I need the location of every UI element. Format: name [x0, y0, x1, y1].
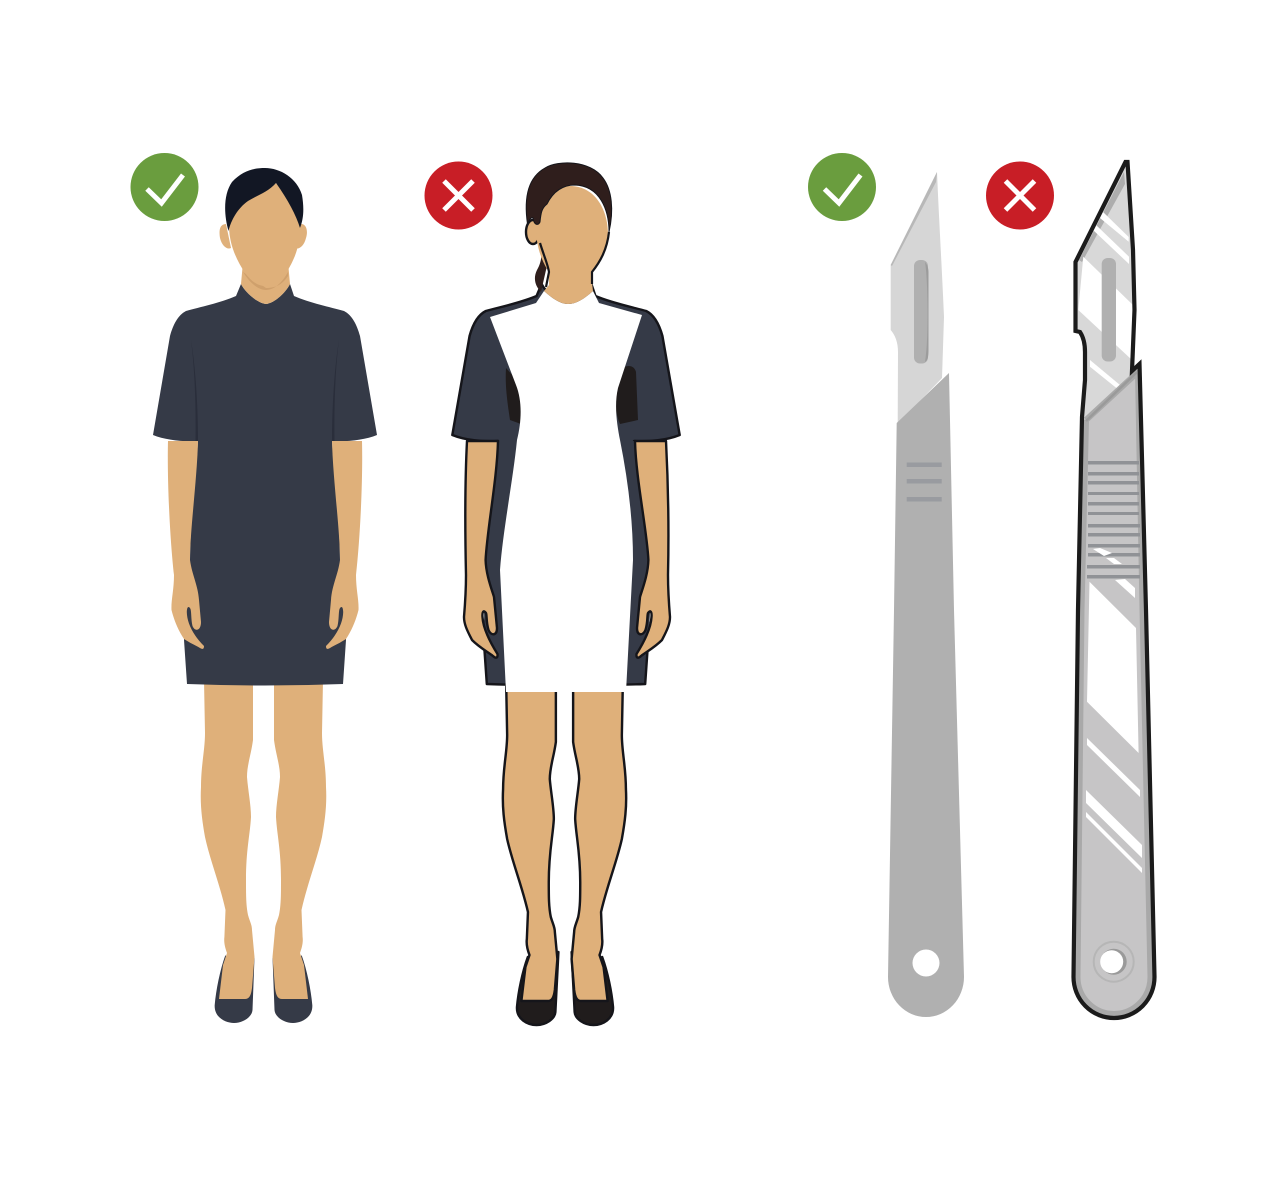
right leg [272, 680, 326, 999]
dress [153, 284, 377, 686]
armpit shadows [506, 366, 638, 424]
left shoe [215, 955, 254, 1023]
figure: incorrect person with white panel and outlines [452, 163, 680, 1025]
grip lines [907, 462, 942, 502]
icon: red cross for scalpel [986, 162, 1054, 230]
neck and face [536, 186, 608, 304]
blade slot [914, 260, 928, 364]
left shoe [517, 952, 558, 1025]
right arm and hand [635, 441, 670, 658]
ears [220, 224, 307, 249]
left ear [526, 220, 540, 244]
handle [888, 373, 964, 1017]
hair [526, 163, 612, 232]
handle fill [1073, 368, 1155, 1018]
jaw outline [540, 232, 609, 287]
right leg [572, 682, 626, 1001]
right arm and hand [326, 441, 362, 649]
handle white reflections [1086, 548, 1142, 873]
left arm and hand [168, 441, 204, 649]
black outline [1074, 162, 1154, 1018]
handle side shade [1078, 372, 1150, 1014]
neck [241, 262, 290, 304]
scalpel: incorrect, outlined with reflections [1073, 162, 1155, 1018]
icon: red cross for person [424, 162, 492, 230]
right shoe [272, 955, 312, 1023]
icon: green check for scalpel [808, 153, 876, 221]
dark dress [452, 284, 680, 686]
handle top edge [1086, 372, 1137, 421]
face [229, 180, 300, 286]
legs and shoes [503, 682, 626, 1025]
blade white stripes [1090, 212, 1129, 388]
blade base [1076, 163, 1135, 420]
grip stripes [1087, 461, 1140, 578]
chin shadow [243, 272, 288, 290]
hole [1100, 950, 1123, 973]
right shoe [572, 952, 613, 1025]
left arm and hand [464, 441, 498, 658]
blade white band [1078, 257, 1133, 360]
figure: correct person in dark uniform [153, 168, 377, 1023]
icon: green check for person [130, 153, 198, 221]
slot shade [925, 262, 928, 362]
handle hole ring [1094, 942, 1134, 982]
ponytail [535, 243, 547, 292]
sleeve creases [191, 340, 339, 441]
white front panel [490, 291, 642, 692]
hair [225, 168, 303, 231]
scalpel: correct, clean [888, 172, 964, 1017]
hole inner shade [1101, 949, 1127, 975]
blade edge shade [891, 172, 937, 266]
left leg [503, 682, 557, 1001]
left leg [201, 680, 254, 999]
blade [891, 172, 944, 424]
dress side fill behind arms [482, 441, 652, 650]
blade slot [1102, 258, 1116, 362]
blade edge shade [1079, 172, 1125, 262]
